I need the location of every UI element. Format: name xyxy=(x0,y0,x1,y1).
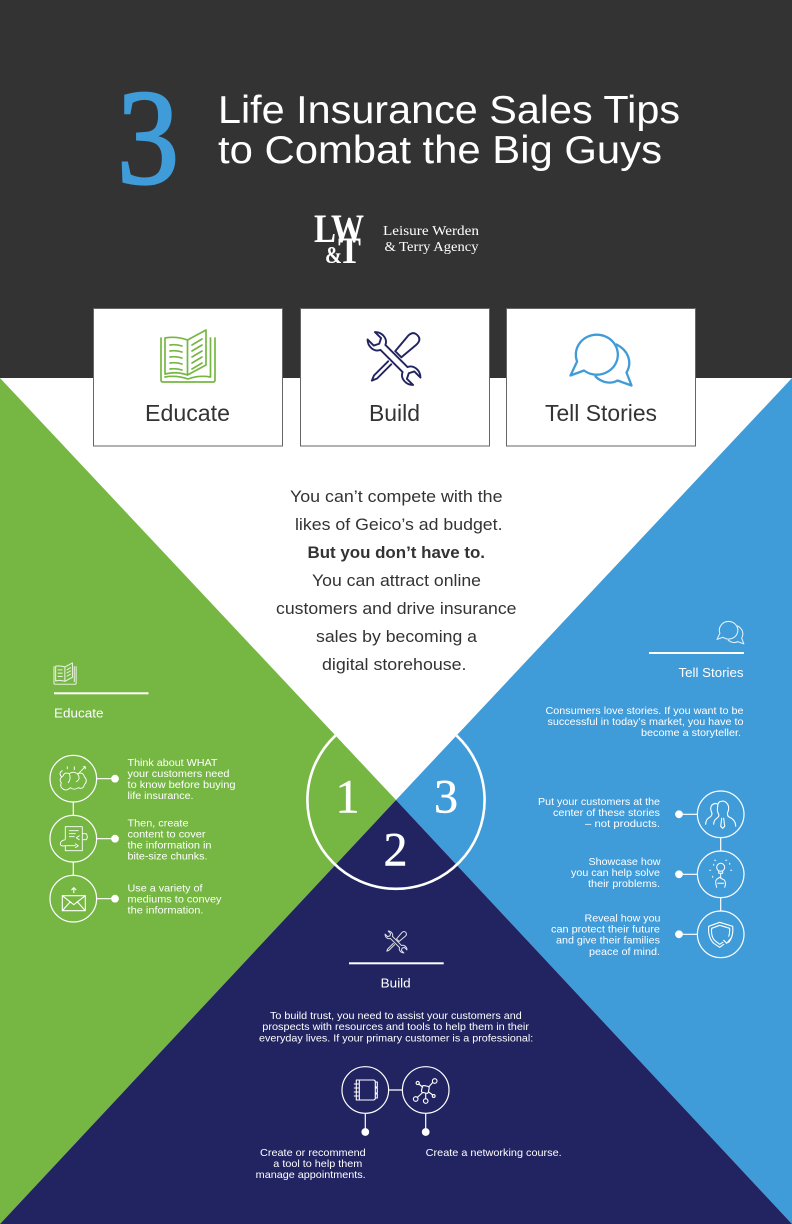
step 2 xyxy=(571,851,744,898)
logo: W xyxy=(331,206,364,251)
panel: Educate content xyxy=(50,663,236,922)
text xyxy=(551,913,661,958)
text xyxy=(128,818,212,863)
intro text: You can attract online xyxy=(312,571,481,590)
title xyxy=(218,89,680,172)
logo: T xyxy=(338,231,361,272)
connectors xyxy=(365,1090,426,1132)
icon: speech bubbles xyxy=(570,335,632,386)
text xyxy=(128,757,236,802)
label: Tell Stories xyxy=(545,400,657,426)
icon: network xyxy=(413,1079,437,1103)
logo xyxy=(314,206,364,272)
panel: navy build triangle xyxy=(0,800,792,1224)
text: a tool to help them xyxy=(273,1158,363,1170)
intro text xyxy=(276,487,516,674)
text: Create or recommend xyxy=(260,1147,366,1159)
panel: dark header background xyxy=(0,0,792,378)
text: life insurance. xyxy=(128,790,194,802)
step 2 xyxy=(50,815,212,863)
text: Think about WHAT xyxy=(128,757,218,769)
text: Showcase how xyxy=(588,856,661,868)
text: Reveal how you xyxy=(584,913,661,925)
text: your customers need xyxy=(128,768,230,780)
intro paragraph: become a storyteller. xyxy=(641,727,741,739)
option 2 xyxy=(402,1067,562,1159)
text: Put your customers at the xyxy=(538,796,660,808)
icon: shield xyxy=(709,922,733,947)
text: and give their families xyxy=(556,935,660,947)
text xyxy=(571,856,661,890)
icon: document xyxy=(60,827,87,851)
panel: Build content xyxy=(256,930,562,1181)
intro text: sales by becoming a xyxy=(316,627,478,646)
intro text: digital storehouse. xyxy=(322,655,466,674)
text xyxy=(128,883,222,916)
text: their problems. xyxy=(588,878,660,890)
text xyxy=(256,1147,366,1181)
heading: Build xyxy=(381,977,411,991)
icon: small speech bubbles xyxy=(717,621,744,644)
text: Then, create xyxy=(128,818,189,830)
icon: wrench and screwdriver xyxy=(365,330,423,387)
card: Build xyxy=(300,308,490,446)
step 1 xyxy=(50,755,236,802)
icon: brain with arrows xyxy=(60,767,86,790)
divider xyxy=(649,652,744,654)
text: – not products. xyxy=(585,818,660,830)
icon: people xyxy=(706,801,736,828)
text: peace of mind. xyxy=(589,946,660,958)
panel: Tell Stories content xyxy=(538,621,744,958)
text: the information. xyxy=(128,904,204,916)
text: manage appointments. xyxy=(256,1169,366,1181)
heading: Tell Stories xyxy=(678,666,744,680)
label: Educate xyxy=(145,400,230,426)
icon: open book xyxy=(161,330,215,382)
text: can protect their future xyxy=(551,924,660,936)
logo wordmark: & Terry Agency xyxy=(384,240,478,255)
intro paragraph: everyday lives. If your primary customer is a professional: xyxy=(259,1032,533,1044)
panel: blue tell stories triangle xyxy=(396,378,792,1224)
card: Educate xyxy=(94,308,282,446)
text: bite-size chunks. xyxy=(128,851,208,863)
divider xyxy=(349,962,444,964)
step 1 xyxy=(538,791,744,838)
intro paragraph: prospects with resources and tools to help them in their xyxy=(262,1021,530,1033)
logo: L xyxy=(314,206,336,251)
intro paragraph: To build trust, you need to assist your customers and xyxy=(270,1010,522,1022)
title: Life Insurance Sales Tips xyxy=(218,89,680,132)
icon: small tools xyxy=(384,930,408,954)
text xyxy=(538,796,660,830)
text: center of these stories xyxy=(553,807,660,819)
text: content to cover xyxy=(128,829,206,841)
logo wordmark xyxy=(383,224,479,255)
intro paragraph xyxy=(546,705,744,739)
icon: envelope xyxy=(62,888,85,911)
step 3 xyxy=(551,911,744,958)
intro text: You can’t compete with the xyxy=(290,487,502,506)
connectors xyxy=(73,779,115,899)
intro text: likes of Geico’s ad budget. xyxy=(295,515,502,534)
heading: Educate xyxy=(54,706,104,720)
text: you can help solve xyxy=(571,867,660,879)
card: Tell Stories xyxy=(506,308,696,446)
numbered circle xyxy=(307,736,485,889)
intro text: But you don’t have to. xyxy=(308,543,485,562)
icon: small book xyxy=(54,663,76,684)
big numeral 3: 3 xyxy=(117,63,179,213)
intro paragraph: Consumers love stories. If you want to be xyxy=(546,705,744,717)
number 3: 3 xyxy=(434,770,458,824)
intro paragraph xyxy=(259,1010,533,1044)
connectors xyxy=(679,814,721,934)
label: Build xyxy=(369,400,420,426)
text: to know before buying xyxy=(128,779,236,791)
option 1 xyxy=(256,1067,389,1181)
intro text: customers and drive insurance xyxy=(276,599,516,618)
number 2: 2 xyxy=(384,824,408,876)
icon: light bulb in hand xyxy=(710,860,732,887)
step 3 xyxy=(50,875,222,922)
panel: white centre triangle background xyxy=(0,378,792,800)
text: the information in xyxy=(128,840,212,852)
panel: green educate triangle xyxy=(0,378,396,1224)
text: Use a variety of xyxy=(128,883,203,895)
divider xyxy=(54,692,148,694)
title: to Combat the Big Guys xyxy=(218,129,662,172)
logo wordmark: Leisure Werden xyxy=(383,224,479,239)
text: Create a networking course. xyxy=(426,1147,562,1159)
text: mediums to convey xyxy=(128,894,222,906)
logo: & xyxy=(325,243,342,269)
icon: notebook xyxy=(354,1080,377,1100)
intro paragraph: successful in today’s market, you have to xyxy=(548,716,744,728)
number 1: 1 xyxy=(336,770,360,824)
